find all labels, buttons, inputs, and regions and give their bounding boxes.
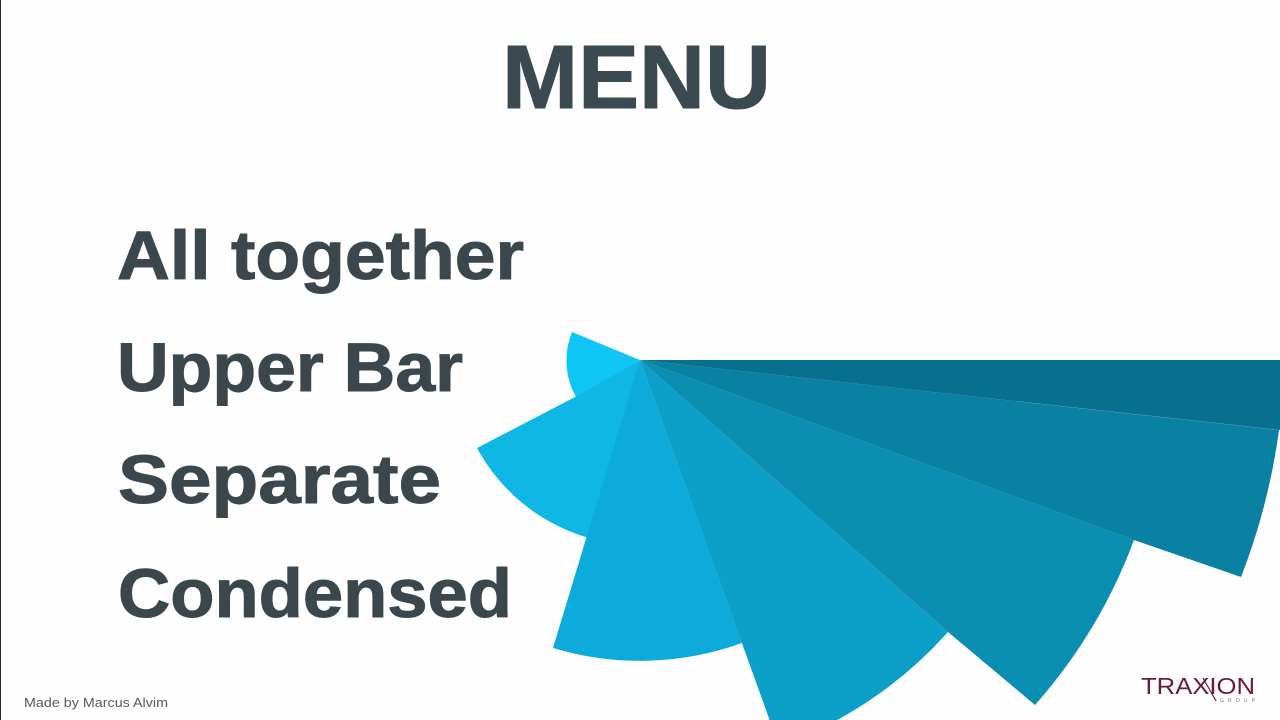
blade 4: [640, 360, 948, 720]
menu item: upper bar: Upper Bar: [117, 329, 463, 406]
blade 2: [477, 360, 640, 537]
menu list: [117, 217, 524, 632]
blade 6: [640, 360, 1279, 577]
menu item: separate: Separate: [118, 441, 441, 518]
credit text: Made by Marcus Alvim: [24, 696, 168, 710]
menu item: condensed: Condensed: [118, 555, 512, 632]
blade 7: darkest top: [640, 360, 1280, 430]
fan graphic: [477, 332, 1280, 720]
blade 1: lightest: [566, 332, 640, 397]
blade 3: [553, 360, 742, 661]
logo: traxion group: GROUP: [1220, 698, 1256, 704]
logo: traxion group: TRAXION: [1141, 673, 1255, 699]
menu item: all together: All together: [117, 217, 524, 294]
title: MENU: [502, 28, 771, 128]
blade 5: [640, 360, 1134, 705]
